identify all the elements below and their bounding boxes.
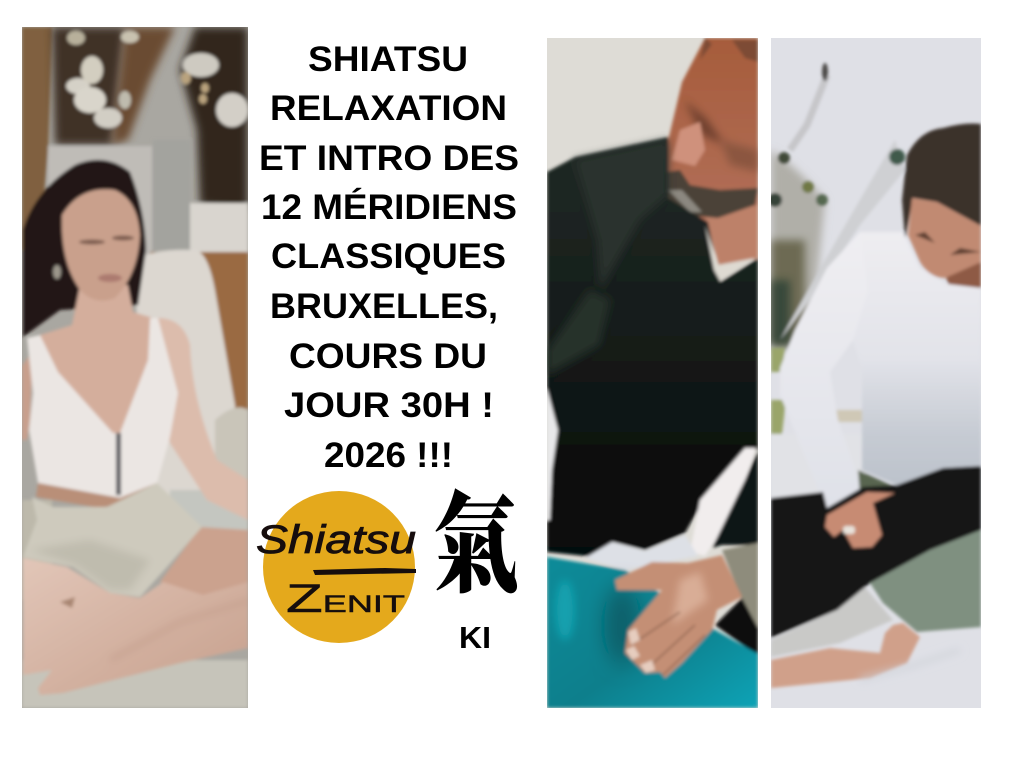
white shirt (853, 232, 981, 485)
hair (23, 160, 146, 337)
face (908, 198, 981, 278)
hair (902, 124, 981, 240)
caption: KI: KI (459, 620, 491, 655)
logo: Shiatsu Zenit (256, 491, 416, 643)
title: BRUXELLES, (270, 287, 498, 326)
logo: Shiatsu Zenit: Shiatsu (256, 518, 416, 562)
peacock feathers (768, 63, 905, 350)
cushion (870, 530, 981, 632)
title: ET INTRO DES (259, 139, 519, 178)
hand on leg (825, 492, 895, 548)
neck and shoulders (40, 283, 152, 435)
title (259, 40, 519, 475)
face (62, 189, 140, 301)
mat (771, 585, 893, 657)
background: dried flowers and pedestals (22, 27, 248, 422)
title: 2026 !!! (324, 436, 453, 475)
panel: photo of male practitioner (547, 38, 758, 708)
hand (615, 555, 742, 678)
panel: photo of woman practitioner (768, 38, 981, 708)
shorts (23, 483, 202, 597)
neck (945, 262, 981, 292)
panel: photo of woman meditating (22, 27, 250, 708)
sleeve (780, 232, 868, 510)
teal blanket (547, 557, 758, 708)
neck (705, 205, 758, 270)
vase and pedestal (771, 348, 786, 434)
black leggings (771, 466, 981, 638)
dark sleeve (712, 450, 758, 548)
title: CLASSIQUES (271, 237, 506, 276)
title: RELAXATION (270, 89, 507, 128)
front leg (23, 558, 248, 695)
beard (667, 170, 758, 218)
back thigh (160, 527, 248, 597)
black jacket (547, 137, 758, 557)
armchair (22, 250, 248, 708)
midriff (35, 483, 140, 508)
woman figure (22, 160, 250, 695)
lower arm and hand (771, 623, 920, 688)
icon: ki kanji: 氣 (434, 458, 518, 615)
title: JOUR 30H ! (284, 386, 494, 425)
title: SHIATSU (308, 40, 468, 79)
logo: Shiatsu Zenit: Z ENIT (286, 577, 406, 621)
head (667, 38, 758, 225)
white top (27, 318, 178, 498)
white shirt and background gap (690, 448, 756, 556)
white collar (705, 225, 755, 281)
title: 12 MÉRIDIENS (261, 187, 517, 227)
green waistband (856, 468, 892, 492)
title: COURS DU (289, 337, 487, 376)
